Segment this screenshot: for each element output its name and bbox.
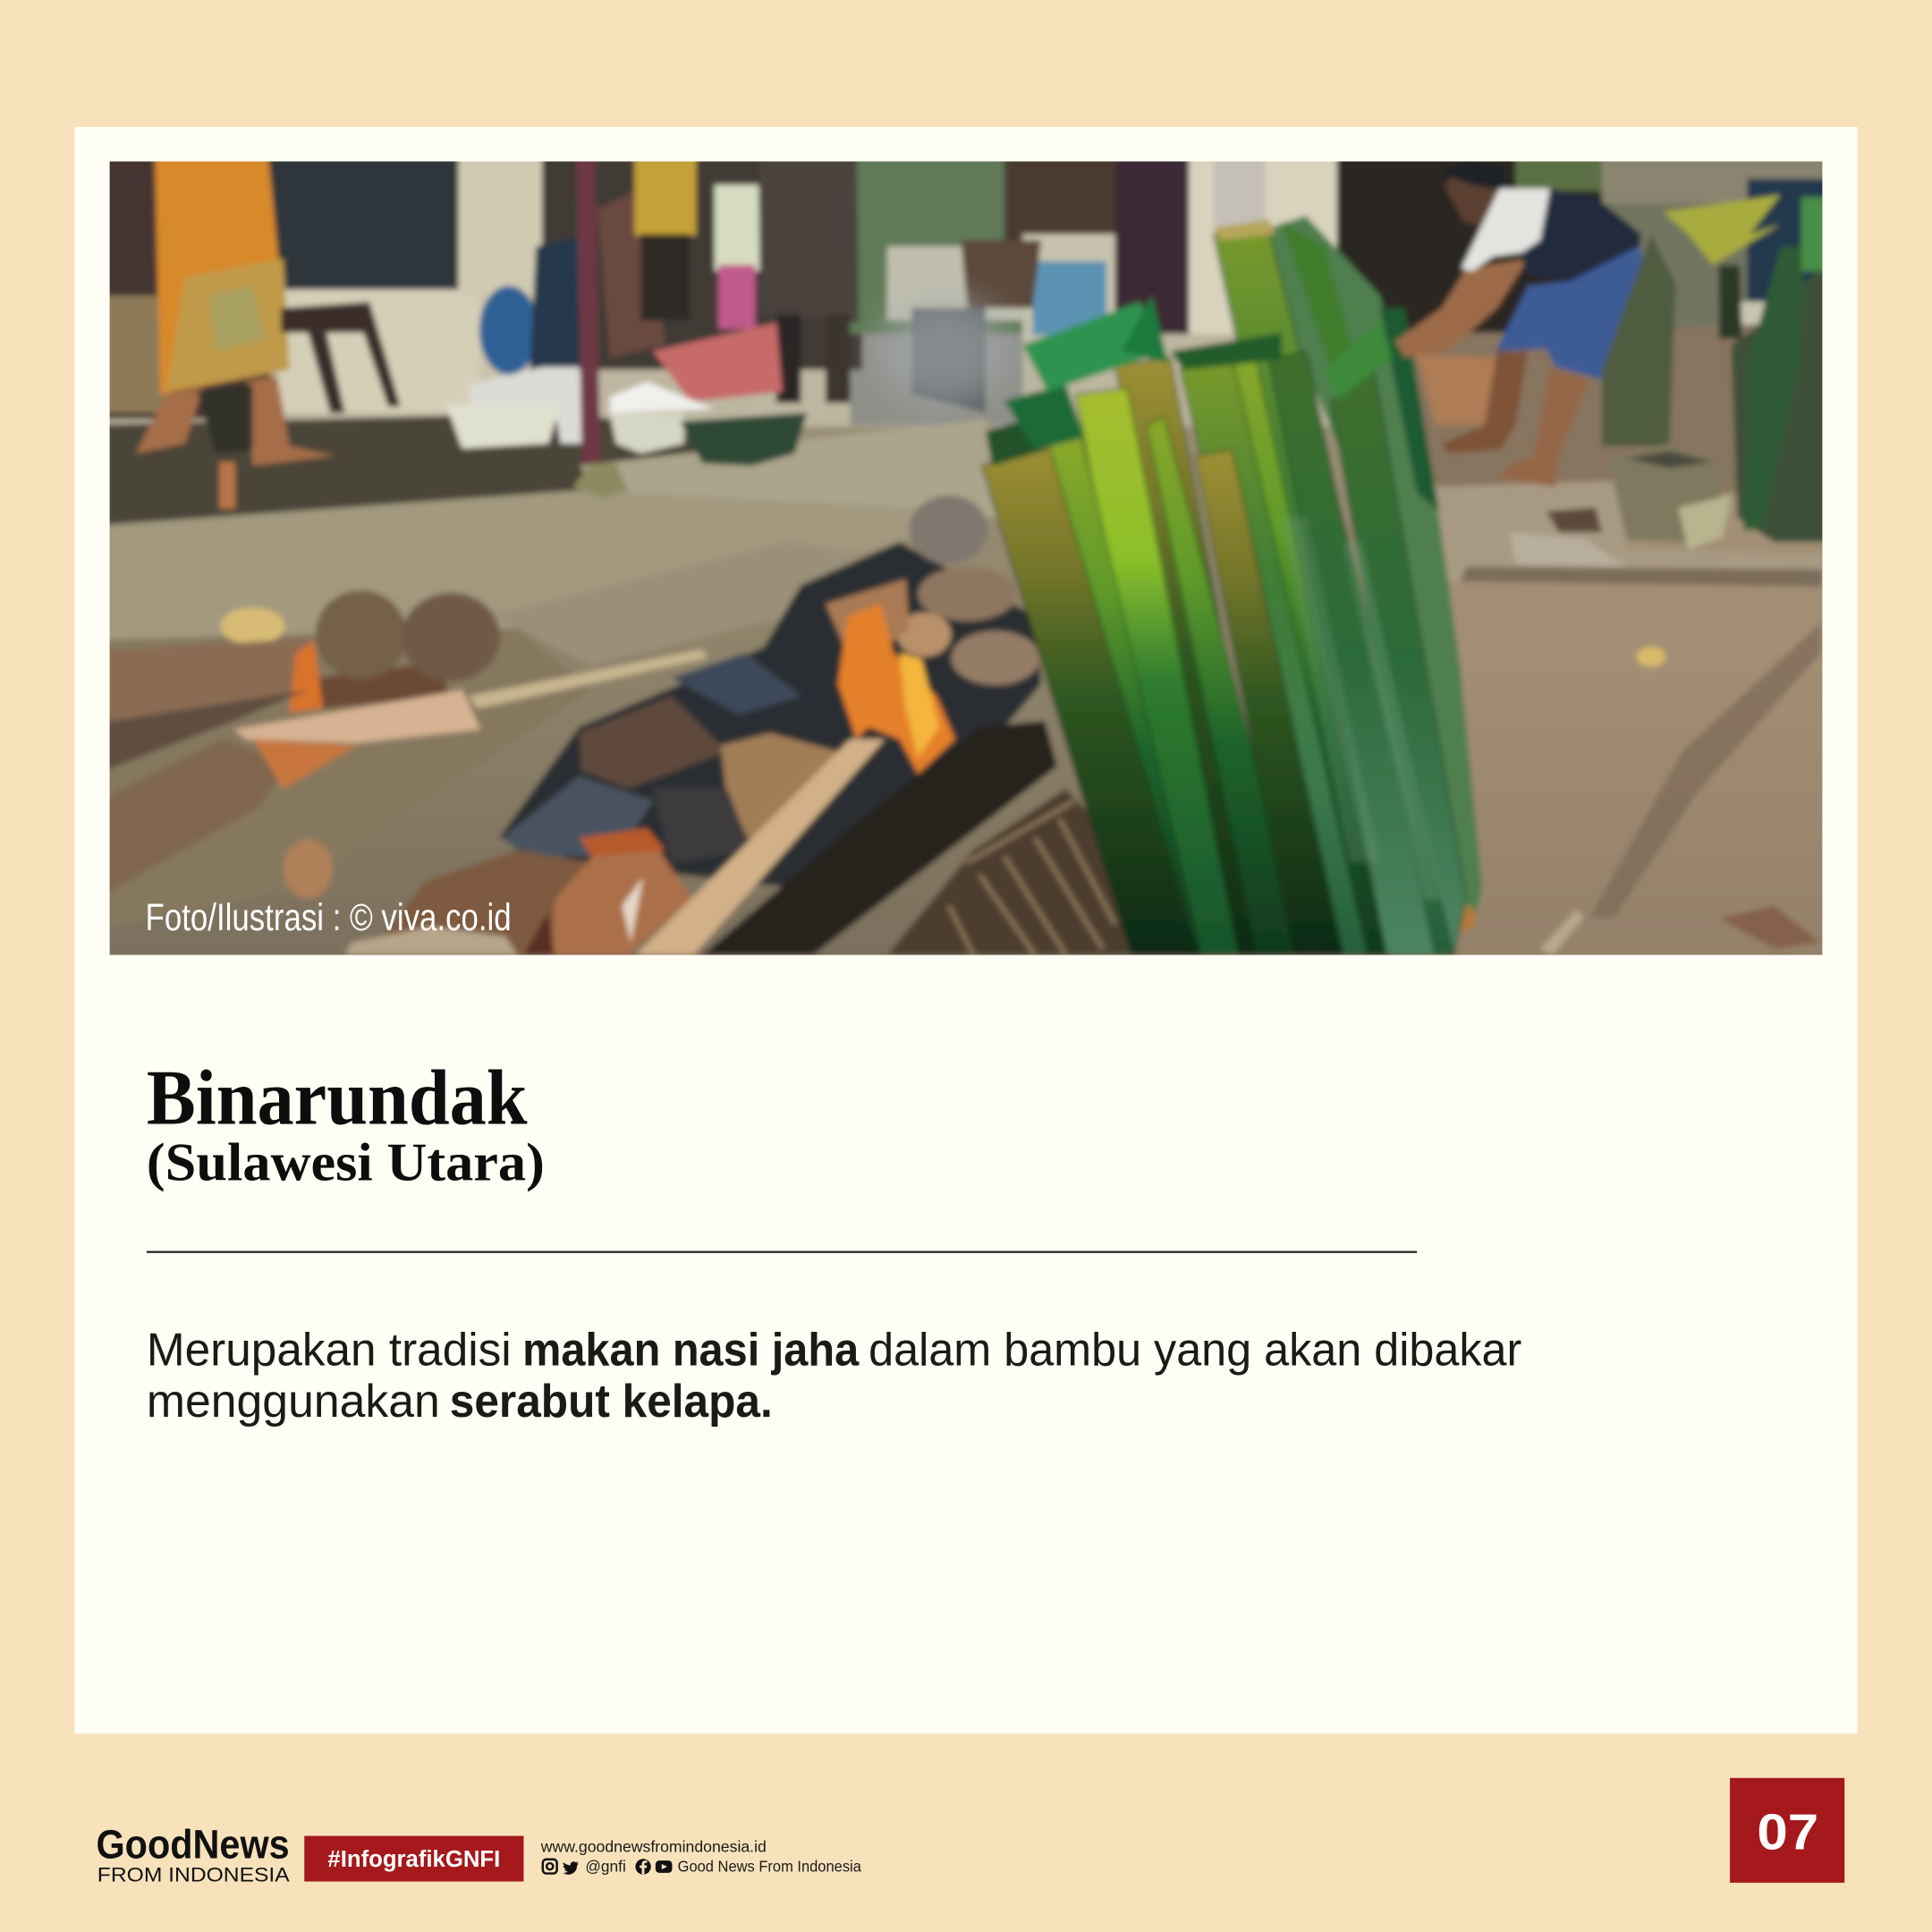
body text: [147, 1324, 1521, 1428]
icon: facebook: [635, 1859, 651, 1875]
footer logo: GoodNews From Indonesia: [96, 1821, 290, 1886]
footer logo: GoodNews From Indonesia: FROM INDONESIA: [97, 1864, 290, 1886]
channel name: Good News From Indonesia: [678, 1857, 861, 1875]
icon: twitter: [563, 1861, 579, 1875]
photo: bamboo rice cooking over coconut husk fire: [109, 161, 1823, 955]
icon: instagram: [543, 1860, 557, 1874]
body text: serabut kelapa.: [450, 1376, 773, 1428]
icon: youtube: [656, 1860, 672, 1873]
body text: Merupakan tradisi: [147, 1324, 512, 1376]
footer website and social handles: www.goodnewsfromindonesia.id: [540, 1837, 767, 1855]
page number badge: [1730, 1778, 1844, 1883]
handle: gnfi: @gnfi: [585, 1857, 626, 1875]
body text: makan nasi jaha: [522, 1324, 860, 1376]
panel: content card: [74, 127, 1858, 1733]
footer logo: GoodNews From Indonesia: GoodNews: [96, 1821, 290, 1867]
heading divider: [147, 1251, 1417, 1253]
title: Binarundak: [147, 1054, 528, 1141]
footer website and social handles: [540, 1837, 861, 1875]
hashtag badge: [304, 1836, 523, 1882]
body text: menggunakan: [147, 1376, 440, 1428]
hashtag badge: #InfografikGNFI: [327, 1845, 500, 1872]
title: (Sulawesi Utara): [147, 1133, 545, 1193]
body text: dalam bambu yang akan dibakar: [869, 1324, 1521, 1376]
title: [147, 1054, 545, 1193]
page number badge: 07: [1757, 1804, 1818, 1860]
photo credit caption: Foto/Ilustrasi : © viva.co.id: [146, 896, 512, 939]
